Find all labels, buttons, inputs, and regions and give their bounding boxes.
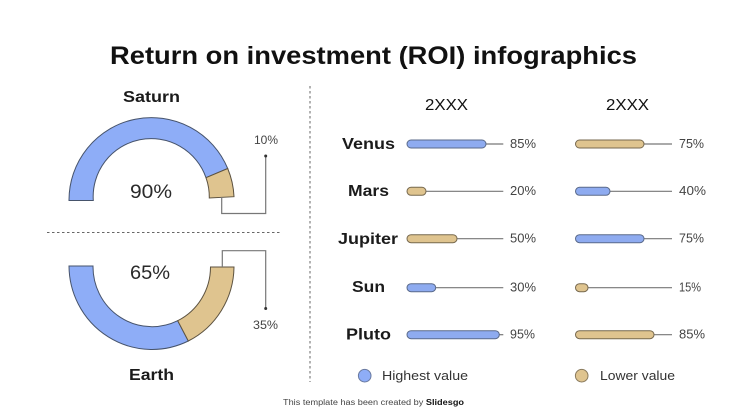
row: Mars: 20% xyxy=(510,184,536,198)
value: 65%: 65% xyxy=(130,262,170,284)
row: Sun xyxy=(352,279,701,296)
row: Jupiter: Jupiter xyxy=(338,231,398,248)
row: Sun: Sun xyxy=(352,279,385,296)
legend: lower value: Lower value xyxy=(600,368,675,383)
arc: Saturn lower value xyxy=(206,168,234,198)
leader line: Earth 35% xyxy=(222,251,267,310)
leader line: Saturn 10% xyxy=(222,154,267,214)
value: 10%: 10% xyxy=(254,133,278,147)
row: Mars xyxy=(348,183,706,200)
row: Mars: 40% xyxy=(679,184,706,198)
value: 90%: 90% xyxy=(130,181,172,203)
legend: highest value: Highest value xyxy=(382,368,468,383)
row: Jupiter: 75% xyxy=(679,232,704,246)
row: Jupiter xyxy=(338,231,704,248)
arc: Earth lower value xyxy=(178,267,234,341)
row: Mars: Mars xyxy=(348,183,389,200)
row: Pluto xyxy=(346,326,705,344)
title: Return on investment (ROI) infographics xyxy=(110,42,637,70)
row: Sun: 15% xyxy=(679,280,701,294)
row: Venus xyxy=(342,136,704,153)
panel: Earth donut xyxy=(69,251,278,384)
value: 35%: 35% xyxy=(253,318,278,332)
row: Sun: 30% xyxy=(510,280,536,294)
row: Jupiter: 50% xyxy=(510,232,536,246)
row: Venus: Venus xyxy=(342,136,395,153)
column header: first 2XXX: 2XXX xyxy=(425,97,469,114)
panel: Saturn donut xyxy=(69,89,278,214)
row: Pluto: 95% xyxy=(510,328,535,342)
arc: Saturn highest value xyxy=(69,118,228,200)
footer credit: This template has been created by Slidesgo xyxy=(283,398,464,407)
row: Venus: 85% xyxy=(510,137,536,151)
row: Venus: 75% xyxy=(679,137,704,151)
row: Pluto: 85% xyxy=(679,328,705,342)
heading: Earth: Earth xyxy=(129,367,174,384)
heading: Saturn: Saturn xyxy=(123,89,180,106)
row: Pluto: Pluto xyxy=(346,326,391,344)
column header: second 2XXX: 2XXX xyxy=(606,97,650,114)
arc: Earth highest value xyxy=(69,266,188,349)
